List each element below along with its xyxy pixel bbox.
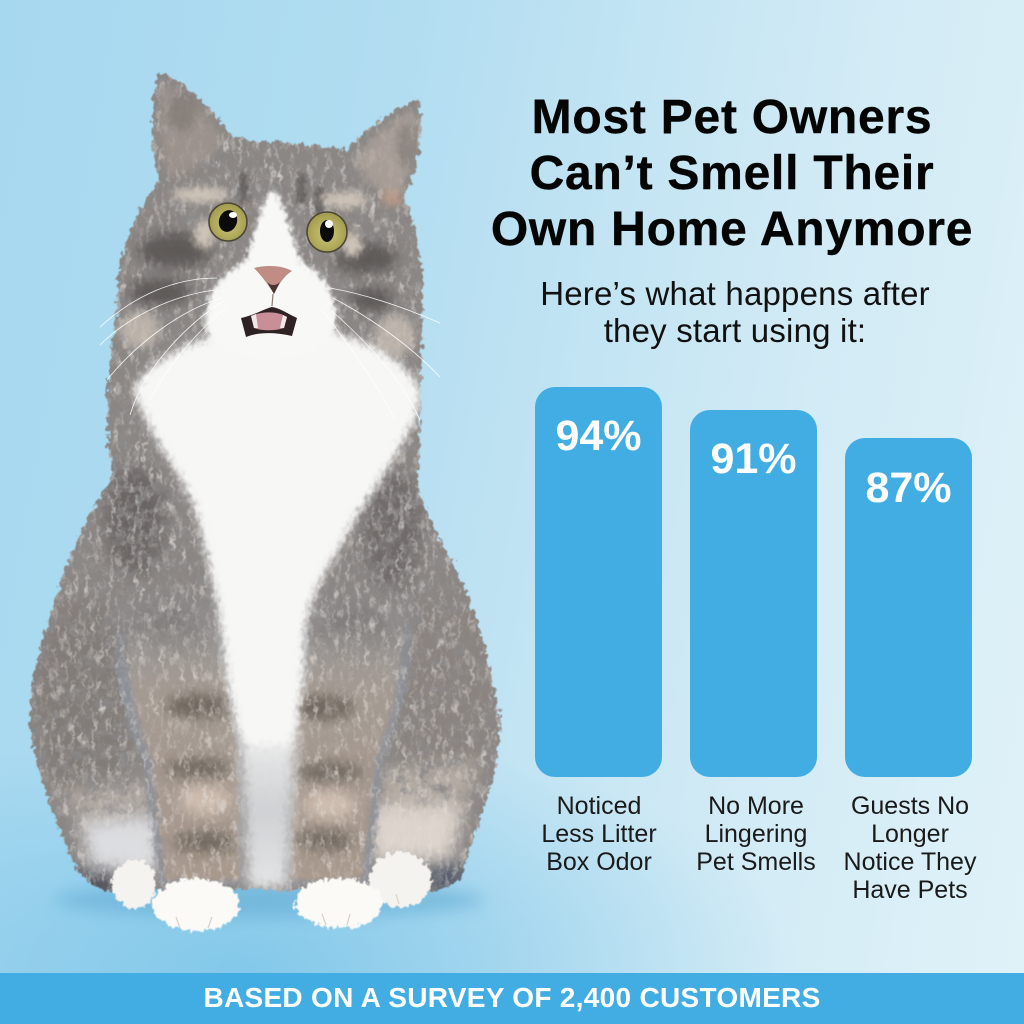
left foreleg: [112, 590, 243, 885]
title: Most Pet Owners: [532, 91, 932, 144]
body and head silhouette: [27, 72, 503, 893]
footer banner: [0, 973, 1024, 1024]
light fur texture: [30, 76, 502, 892]
label: pet smells: Lingering: [705, 820, 807, 848]
footer banner: BASED ON A SURVEY OF 2,400 CUSTOMERS: [203, 982, 821, 1013]
label: guests: Longer: [871, 820, 949, 848]
label: guests: [844, 792, 976, 904]
subtitle: Here’s what happens after: [540, 275, 930, 312]
brow highlights: [120, 188, 415, 355]
back left paw: [112, 859, 156, 909]
whiskers: [100, 278, 440, 420]
bar: 87%: [845, 438, 972, 777]
subtitle: [540, 275, 930, 349]
label: guests: Notice They: [844, 848, 976, 876]
label: pet smells: No More: [708, 792, 804, 820]
cat fur mass: [27, 72, 503, 893]
subtitle: they start using it:: [604, 312, 866, 349]
title: [491, 91, 973, 256]
label: pet smells: Pet Smells: [696, 848, 816, 876]
title: Own Home Anymore: [491, 203, 973, 256]
white chest and lower face: [134, 330, 422, 745]
label: guests: Have Pets: [852, 876, 968, 904]
head tabby patches: [128, 232, 397, 312]
label: litter box odor: Noticed: [557, 792, 641, 820]
left eye: [209, 203, 247, 241]
pale lower haunches: [68, 805, 466, 895]
upper body tones: [105, 465, 422, 668]
back right paw: [369, 852, 431, 908]
cat photo illustration: [27, 72, 503, 934]
label: litter box odor: Box Odor: [546, 848, 652, 876]
dark fur texture: [32, 382, 478, 822]
between the legs: [238, 715, 298, 888]
nose: [254, 266, 292, 306]
leg tabby stripes: [164, 694, 364, 852]
white blaze and muzzle: [206, 188, 336, 361]
label: litter box odor: [541, 792, 657, 876]
cat shadow: [55, 882, 485, 918]
label: pet smells: [696, 792, 816, 876]
bar: 87%: 87%: [865, 464, 952, 512]
right foreleg: [287, 590, 416, 885]
label: litter box odor: Less Litter: [541, 820, 657, 848]
front right paw: [295, 878, 383, 928]
label: guests: Guests No: [851, 792, 969, 820]
bar: 91%: 91%: [710, 435, 797, 483]
mouth: [241, 307, 297, 337]
haunch tones: [35, 600, 495, 830]
cat: [27, 72, 503, 934]
bar: 94%: [535, 387, 662, 777]
title: Can’t Smell Their: [530, 147, 934, 200]
ears: [160, 85, 415, 206]
bar: 91%: [690, 410, 817, 777]
right eye: [307, 212, 347, 252]
bar: 94%: 94%: [555, 412, 642, 460]
paw toe lines: [176, 894, 399, 928]
front left paw: [152, 879, 240, 931]
